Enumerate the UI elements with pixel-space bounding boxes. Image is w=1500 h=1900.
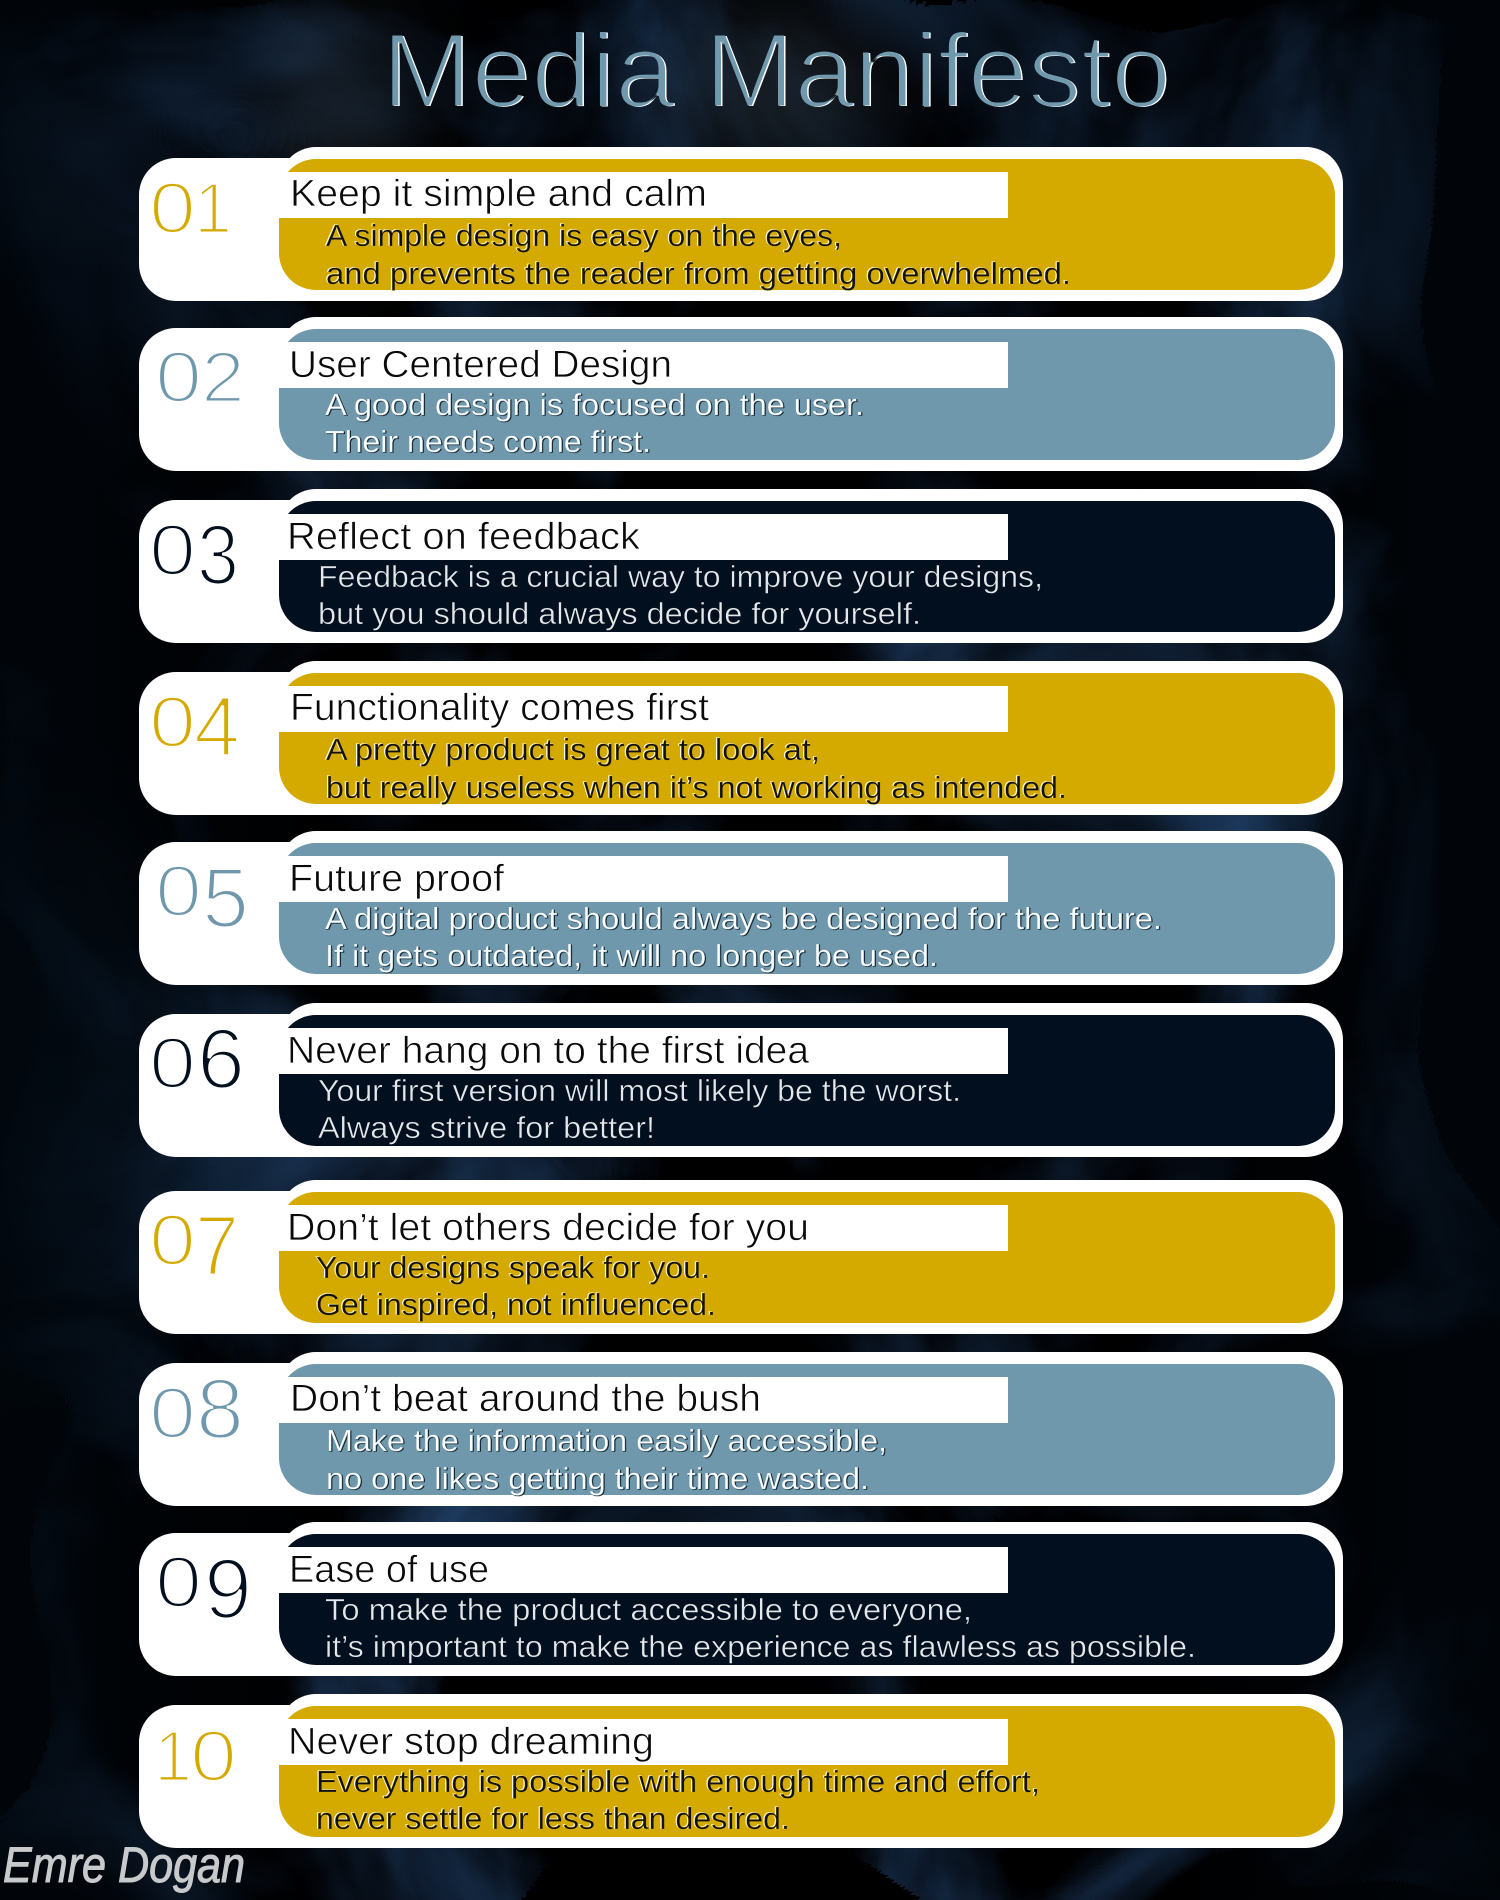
body 09: To make the product accessible to everyone, [325,1592,972,1627]
number 08: 8 [196,1362,244,1457]
panel: item 04 [139,661,1343,815]
number 05 [155,851,249,946]
body 05: A digital product should always be designed for the future. [325,901,1162,936]
number 05: 5 [202,851,249,946]
body 02: A good design is focused on the user. [325,387,864,422]
number 10: 0 [190,1717,237,1797]
heading 10: Never stop dreaming [288,1721,654,1763]
title: Media Manifesto [382,12,1171,130]
number 09 [155,1542,252,1637]
number 06 [149,1012,245,1107]
body 06: Your first version will most likely be the worst. [318,1073,961,1108]
body 07: Your designs speak for you. [316,1250,710,1285]
number 07: 7 [195,1199,239,1294]
number 08 [149,1362,244,1457]
panel: item 03 [139,489,1343,643]
number 07: 0 [149,1201,196,1281]
heading 04: Functionality comes first [290,687,709,729]
body 09: it’s important to make the experience as flawless as possible. [325,1629,1196,1664]
body 09 [325,1592,1196,1664]
body 01 [326,218,1071,291]
heading 01: Keep it simple and calm [290,173,707,215]
heading 07: Don’t let others decide for you [287,1207,809,1249]
body 03 [318,559,1043,631]
panel: item 10 [139,1694,1343,1848]
body 01: and prevents the reader from getting overwhelmed. [326,256,1071,291]
panel: item 07 [139,1180,1343,1334]
body 02: Their needs come first. [325,424,651,459]
number 06: 0 [149,1024,196,1104]
number 03 [149,508,239,603]
body 10: Everything is possible with enough time and effort, [316,1764,1040,1799]
body 04: A pretty product is great to look at, [326,732,820,767]
body 01: A simple design is easy on the eyes, [326,218,842,253]
number 01 [149,169,232,249]
body 04: but really useless when it’s not working as intended. [326,770,1067,805]
panel: item 02 [139,317,1343,471]
panel: item 01 [139,147,1343,301]
body 02 [325,387,864,459]
number 04: 4 [194,680,240,775]
author signature: Emre Dogan [3,1837,245,1893]
body 07: Get inspired, not influenced. [316,1287,716,1322]
number 01: 1 [194,169,232,249]
number 06: 6 [197,1012,245,1107]
number 10 [154,1717,237,1797]
number 02: 2 [201,338,245,418]
number 04 [149,680,240,775]
number 05: 0 [155,852,202,932]
body 07 [316,1250,716,1322]
panel: item 05 [139,831,1343,985]
body 05 [325,901,1162,973]
number 08: 0 [149,1374,196,1454]
body 10: never settle for less than desired. [316,1801,790,1836]
number 02 [155,338,245,418]
heading 02: User Centered Design [289,344,672,386]
number 03: 3 [197,508,239,603]
heading 08: Don’t beat around the bush [290,1378,761,1420]
body 08: Make the information easily accessible, [326,1423,887,1458]
number 10: 1 [154,1717,192,1797]
number 01: 0 [149,169,196,249]
body 03: but you should always decide for yourself. [318,596,921,631]
number 07 [149,1199,239,1294]
body 06 [318,1073,961,1145]
body 03: Feedback is a crucial way to improve your designs, [318,559,1043,594]
heading 09: Ease of use [289,1549,489,1591]
number 04: 0 [149,683,196,763]
heading 05: Future proof [289,858,504,900]
body 04 [326,732,1067,805]
number 02: 0 [155,338,202,418]
panel: item 09 [139,1522,1343,1676]
number 03: 0 [149,511,196,591]
heading 06: Never hang on to the first idea [287,1030,810,1072]
number 09: 9 [204,1542,252,1637]
body 06: Always strive for better! [318,1110,655,1145]
body 05: If it gets outdated, it will no longer be used. [325,938,938,973]
panel: item 06 [139,1003,1343,1157]
heading 03: Reflect on feedback [287,516,641,558]
number 09: 0 [155,1543,202,1623]
panel: item 08 [139,1352,1343,1506]
body 08 [326,1423,887,1496]
body 08: no one likes getting their time wasted. [326,1461,869,1496]
body 10 [316,1764,1040,1836]
